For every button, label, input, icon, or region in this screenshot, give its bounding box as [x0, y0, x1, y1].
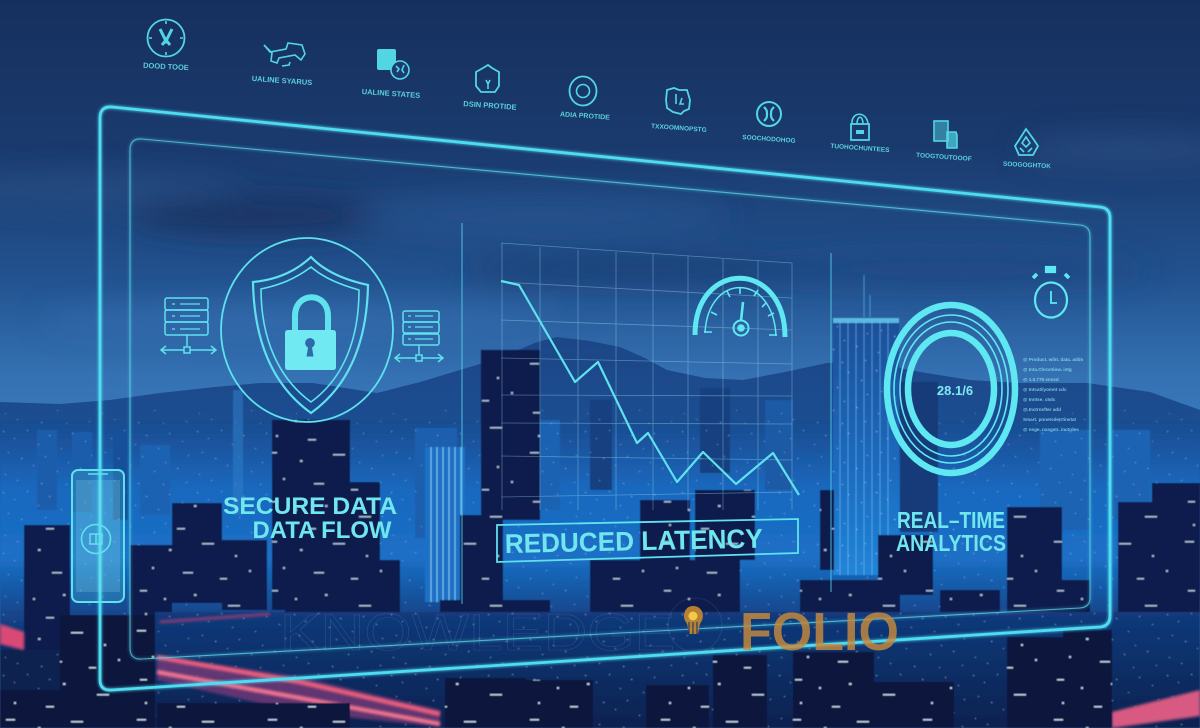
heading: secure data flow: DATA FLOW — [252, 517, 392, 544]
icon: connector ring: SOOCHODOHOG — [742, 134, 796, 145]
analytics ring gauge: 28.1/6 — [937, 383, 973, 398]
foreground dark buildings — [0, 615, 1112, 728]
panel: reduced latency — [497, 243, 799, 562]
heading: real-time analytics — [896, 507, 1006, 556]
heading: real-time analytics: ANALYTICS — [896, 530, 1006, 556]
icon: dashboard tile: UALINE STATES — [361, 87, 420, 100]
icon: devices: UALINE SYARUS — [251, 74, 312, 87]
icon: speed gauge — [695, 278, 785, 337]
icon: right server stack — [395, 311, 443, 362]
analytics readout text: Smart. pnnetsdetrtinstat — [1023, 417, 1077, 422]
icon: hex cluster: SOOGOGHTOK — [1003, 161, 1051, 170]
analytics readout text — [1023, 357, 1084, 432]
city floor — [155, 612, 1200, 728]
icon: documents: TOOGTOUTOOOF — [916, 152, 972, 163]
heading: secure data flow: SECURE DATA — [223, 493, 397, 520]
icon: brain cluster — [651, 88, 707, 134]
analytics readout text: @ Intcatilyomnt cdc — [1023, 387, 1067, 392]
watermark logo — [280, 598, 899, 662]
icon: clock: DOOD TOOE — [143, 61, 189, 72]
red light-trail roads — [0, 614, 1200, 728]
heading: secure data flow — [223, 493, 397, 544]
mid-distance buildings — [24, 350, 1200, 690]
analytics readout text: @ Inntse. c5dc — [1023, 397, 1056, 402]
watermark word: folio: FOLIO — [740, 602, 899, 662]
icon: smartphone — [72, 470, 124, 602]
analytics readout text: @ 1.0.778 snssd — [1023, 377, 1059, 382]
analytics readout text: @ Inta.Chrontiow. intg — [1023, 367, 1072, 372]
icon: padlock card — [830, 114, 890, 154]
holographic panel frames — [100, 107, 1110, 690]
icon: stopwatch — [1033, 267, 1069, 318]
icon: connector ring — [742, 102, 796, 145]
icon: target disc — [560, 76, 610, 122]
analytics readout text: @ Inctrnsfter add — [1023, 407, 1061, 412]
icon: documents — [916, 121, 972, 163]
icon: padlock card: TUOHOCHUNTEES — [830, 143, 890, 154]
icon: shield with padlock — [221, 238, 393, 422]
icon: brain cluster: TXXOOMNOPSTG — [651, 123, 707, 134]
icon: left server stack — [161, 298, 216, 354]
icon: shield frame: DSIN PROTIDE — [463, 99, 517, 112]
watermark word: knowledge: KNOWLEDGE — [280, 604, 675, 662]
city skyline — [0, 275, 1200, 728]
icon: clock — [143, 20, 189, 72]
analytics ring gauge — [887, 305, 1015, 473]
bright glass towers — [233, 275, 938, 602]
icon: target disc: ADIA PROTIDE — [560, 111, 610, 122]
row of top icons with labels — [143, 20, 1051, 170]
icon: lightbulb — [668, 598, 722, 652]
panel: secure data flow — [161, 238, 443, 544]
analytics readout text: @ Product. wiht. data. adds — [1023, 357, 1084, 362]
latency line chart — [501, 281, 799, 495]
analytics readout text: @ nsge. nxsgstr. inctrdes — [1023, 427, 1079, 432]
icon: devices — [251, 43, 312, 87]
mountain range — [0, 337, 1200, 600]
heading: reduced latency box: REDUCED LATENCY — [504, 524, 763, 559]
icon: hex cluster — [1003, 129, 1051, 170]
city haze and distant lights — [0, 388, 1200, 650]
panel divider lines — [462, 223, 831, 604]
panel: real-time analytics — [887, 267, 1084, 556]
icon: dashboard tile — [361, 49, 420, 100]
icon: shield frame — [463, 65, 517, 112]
heading: real-time analytics: REAL–TIME — [897, 507, 1005, 533]
latency chart grid — [501, 243, 792, 510]
